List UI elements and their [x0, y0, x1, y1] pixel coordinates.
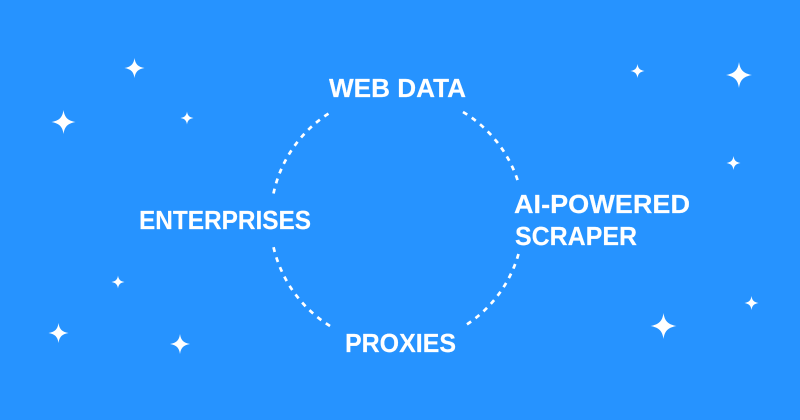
decorative stars: [48, 58, 758, 354]
icon: star: [112, 276, 124, 288]
icon: star: [630, 64, 644, 78]
label: ai-powered scraper: [514, 189, 690, 251]
icon: star: [124, 58, 144, 78]
arc: proxies to enterprises: [274, 247, 330, 326]
label: ai-powered scraper: AI-POWERED: [514, 189, 690, 219]
label: web data: WEB DATA: [329, 73, 466, 103]
icon: star: [52, 110, 76, 134]
dashed cycle ring: [274, 112, 518, 326]
icon: star: [48, 323, 68, 343]
label: enterprises: ENTERPRISES: [139, 205, 311, 235]
icon: star: [726, 156, 740, 170]
label: proxies: PROXIES: [345, 328, 456, 358]
arc: enterprises to web data: [274, 112, 331, 194]
label: ai-powered scraper: SCRAPER: [515, 221, 637, 251]
icon: star: [726, 62, 752, 88]
icon: star: [180, 112, 194, 124]
icon: star: [170, 334, 190, 354]
icon: star: [650, 313, 676, 339]
arc: scraper to proxies: [466, 254, 518, 325]
arc: web data to scraper: [463, 112, 518, 183]
icon: star: [744, 296, 758, 310]
